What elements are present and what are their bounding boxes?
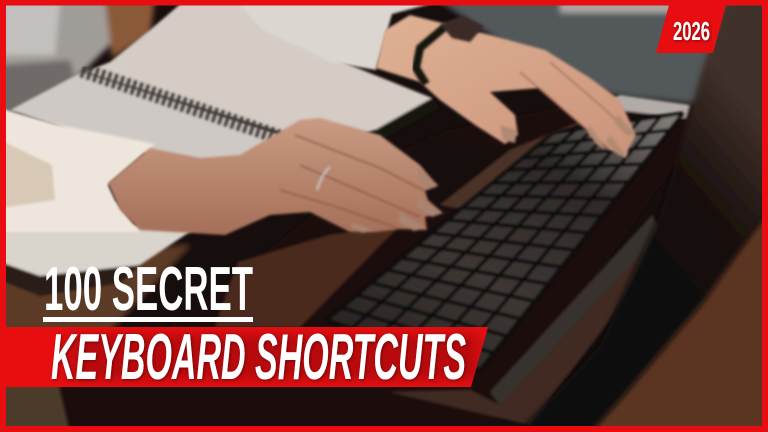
notebook [0, 0, 440, 296]
laptop screen back [520, 0, 768, 432]
laptop body [60, 95, 700, 432]
notebook spiral binding [82, 70, 288, 140]
blurred clothing at top left [0, 0, 155, 115]
year badge [656, 5, 726, 53]
wristwatch [416, 16, 484, 84]
white sleeve, top [235, 0, 445, 70]
heading: 100 secret [43, 255, 253, 324]
banner: keyboard shortcuts [6, 320, 488, 393]
keyboard [327, 113, 683, 370]
heading: 100 secret: 100 SECRET [44, 255, 253, 324]
white sleeve, left [0, 108, 155, 232]
left hand with ring [108, 118, 443, 235]
heading underline [43, 317, 253, 322]
year text: 2026 [673, 16, 710, 46]
right hand [376, 15, 636, 158]
